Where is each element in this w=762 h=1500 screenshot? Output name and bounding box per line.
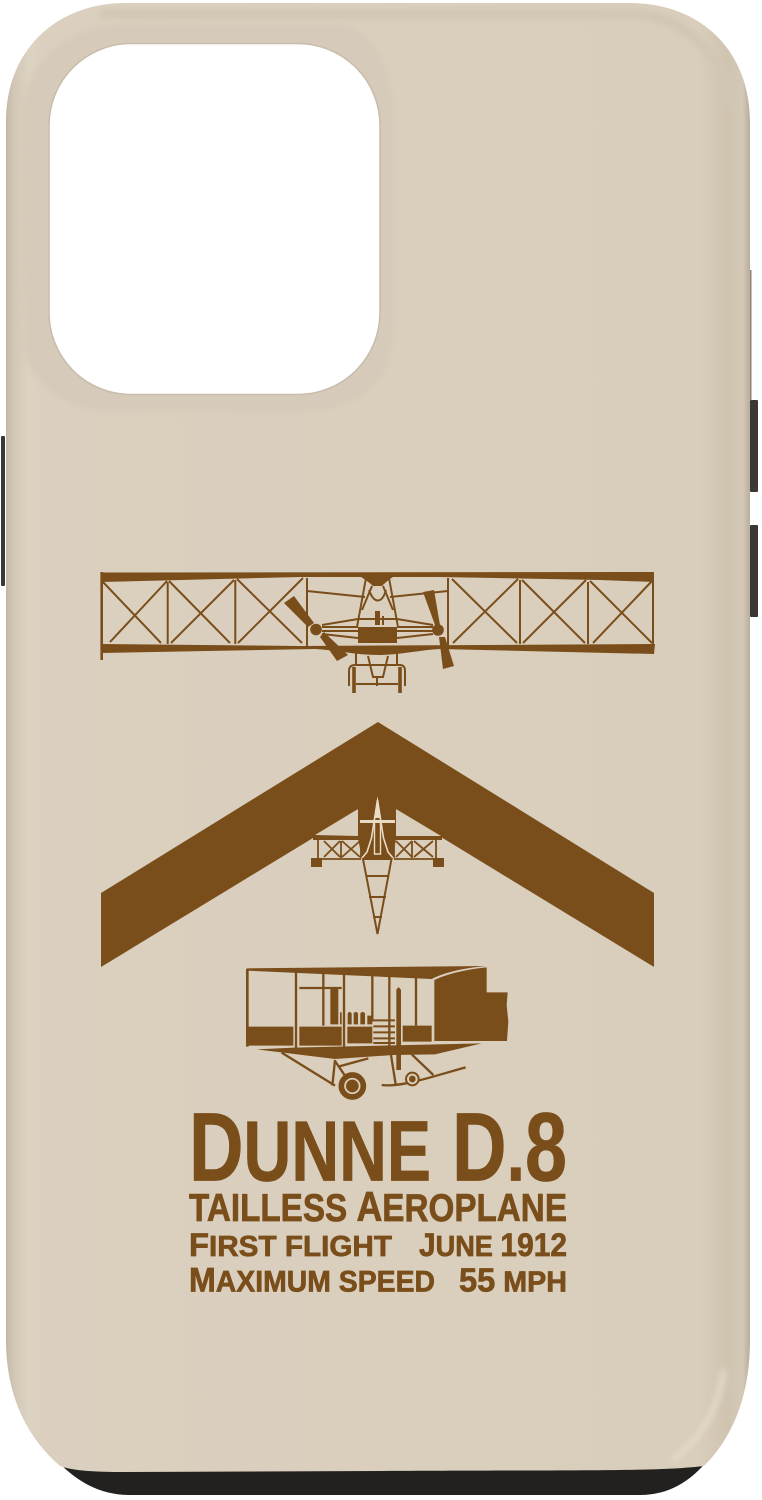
black bottom edge of case [58, 1460, 708, 1495]
illustration: top view flying wing [101, 722, 654, 967]
left propeller [284, 596, 348, 661]
first flight date: JUNE 1912 [419, 1227, 567, 1263]
camera plateau [22, 24, 394, 412]
subtitle: TAILLESS AEROPLANE [189, 1183, 567, 1230]
tail panels [311, 837, 444, 867]
struts [247, 969, 416, 1053]
fuselage [363, 859, 392, 934]
first flight label: FIRST FLIGHT [189, 1227, 392, 1263]
landing gear [349, 652, 405, 693]
engine block [358, 611, 397, 643]
lower wing panels [248, 1026, 432, 1046]
swept wing [101, 722, 654, 967]
maximum speed label: MAXIMUM SPEED [189, 1262, 435, 1300]
maximum speed value: 55 MPH [459, 1262, 567, 1298]
main wheel [341, 1075, 363, 1097]
lower wing strip [257, 1043, 482, 1059]
right propeller [423, 590, 454, 669]
upper wing [247, 966, 486, 979]
rudder [434, 967, 508, 1041]
landing gear [282, 1053, 466, 1086]
wing struts and bracing [102, 572, 653, 660]
upper and lower wings [101, 572, 655, 655]
side buttons [1, 270, 758, 617]
bottom right highlight [672, 1370, 724, 1460]
illustration: front view biplane [101, 572, 655, 693]
wing notches [315, 809, 441, 836]
small wheel [406, 1073, 419, 1085]
pilot and engine details [330, 987, 401, 1070]
title: DUNNE D.8 [189, 1092, 567, 1202]
central spike [360, 796, 395, 858]
illustration: side view biplane [247, 966, 508, 1097]
top rim shading [100, 14, 735, 110]
camera cutout [49, 44, 380, 394]
